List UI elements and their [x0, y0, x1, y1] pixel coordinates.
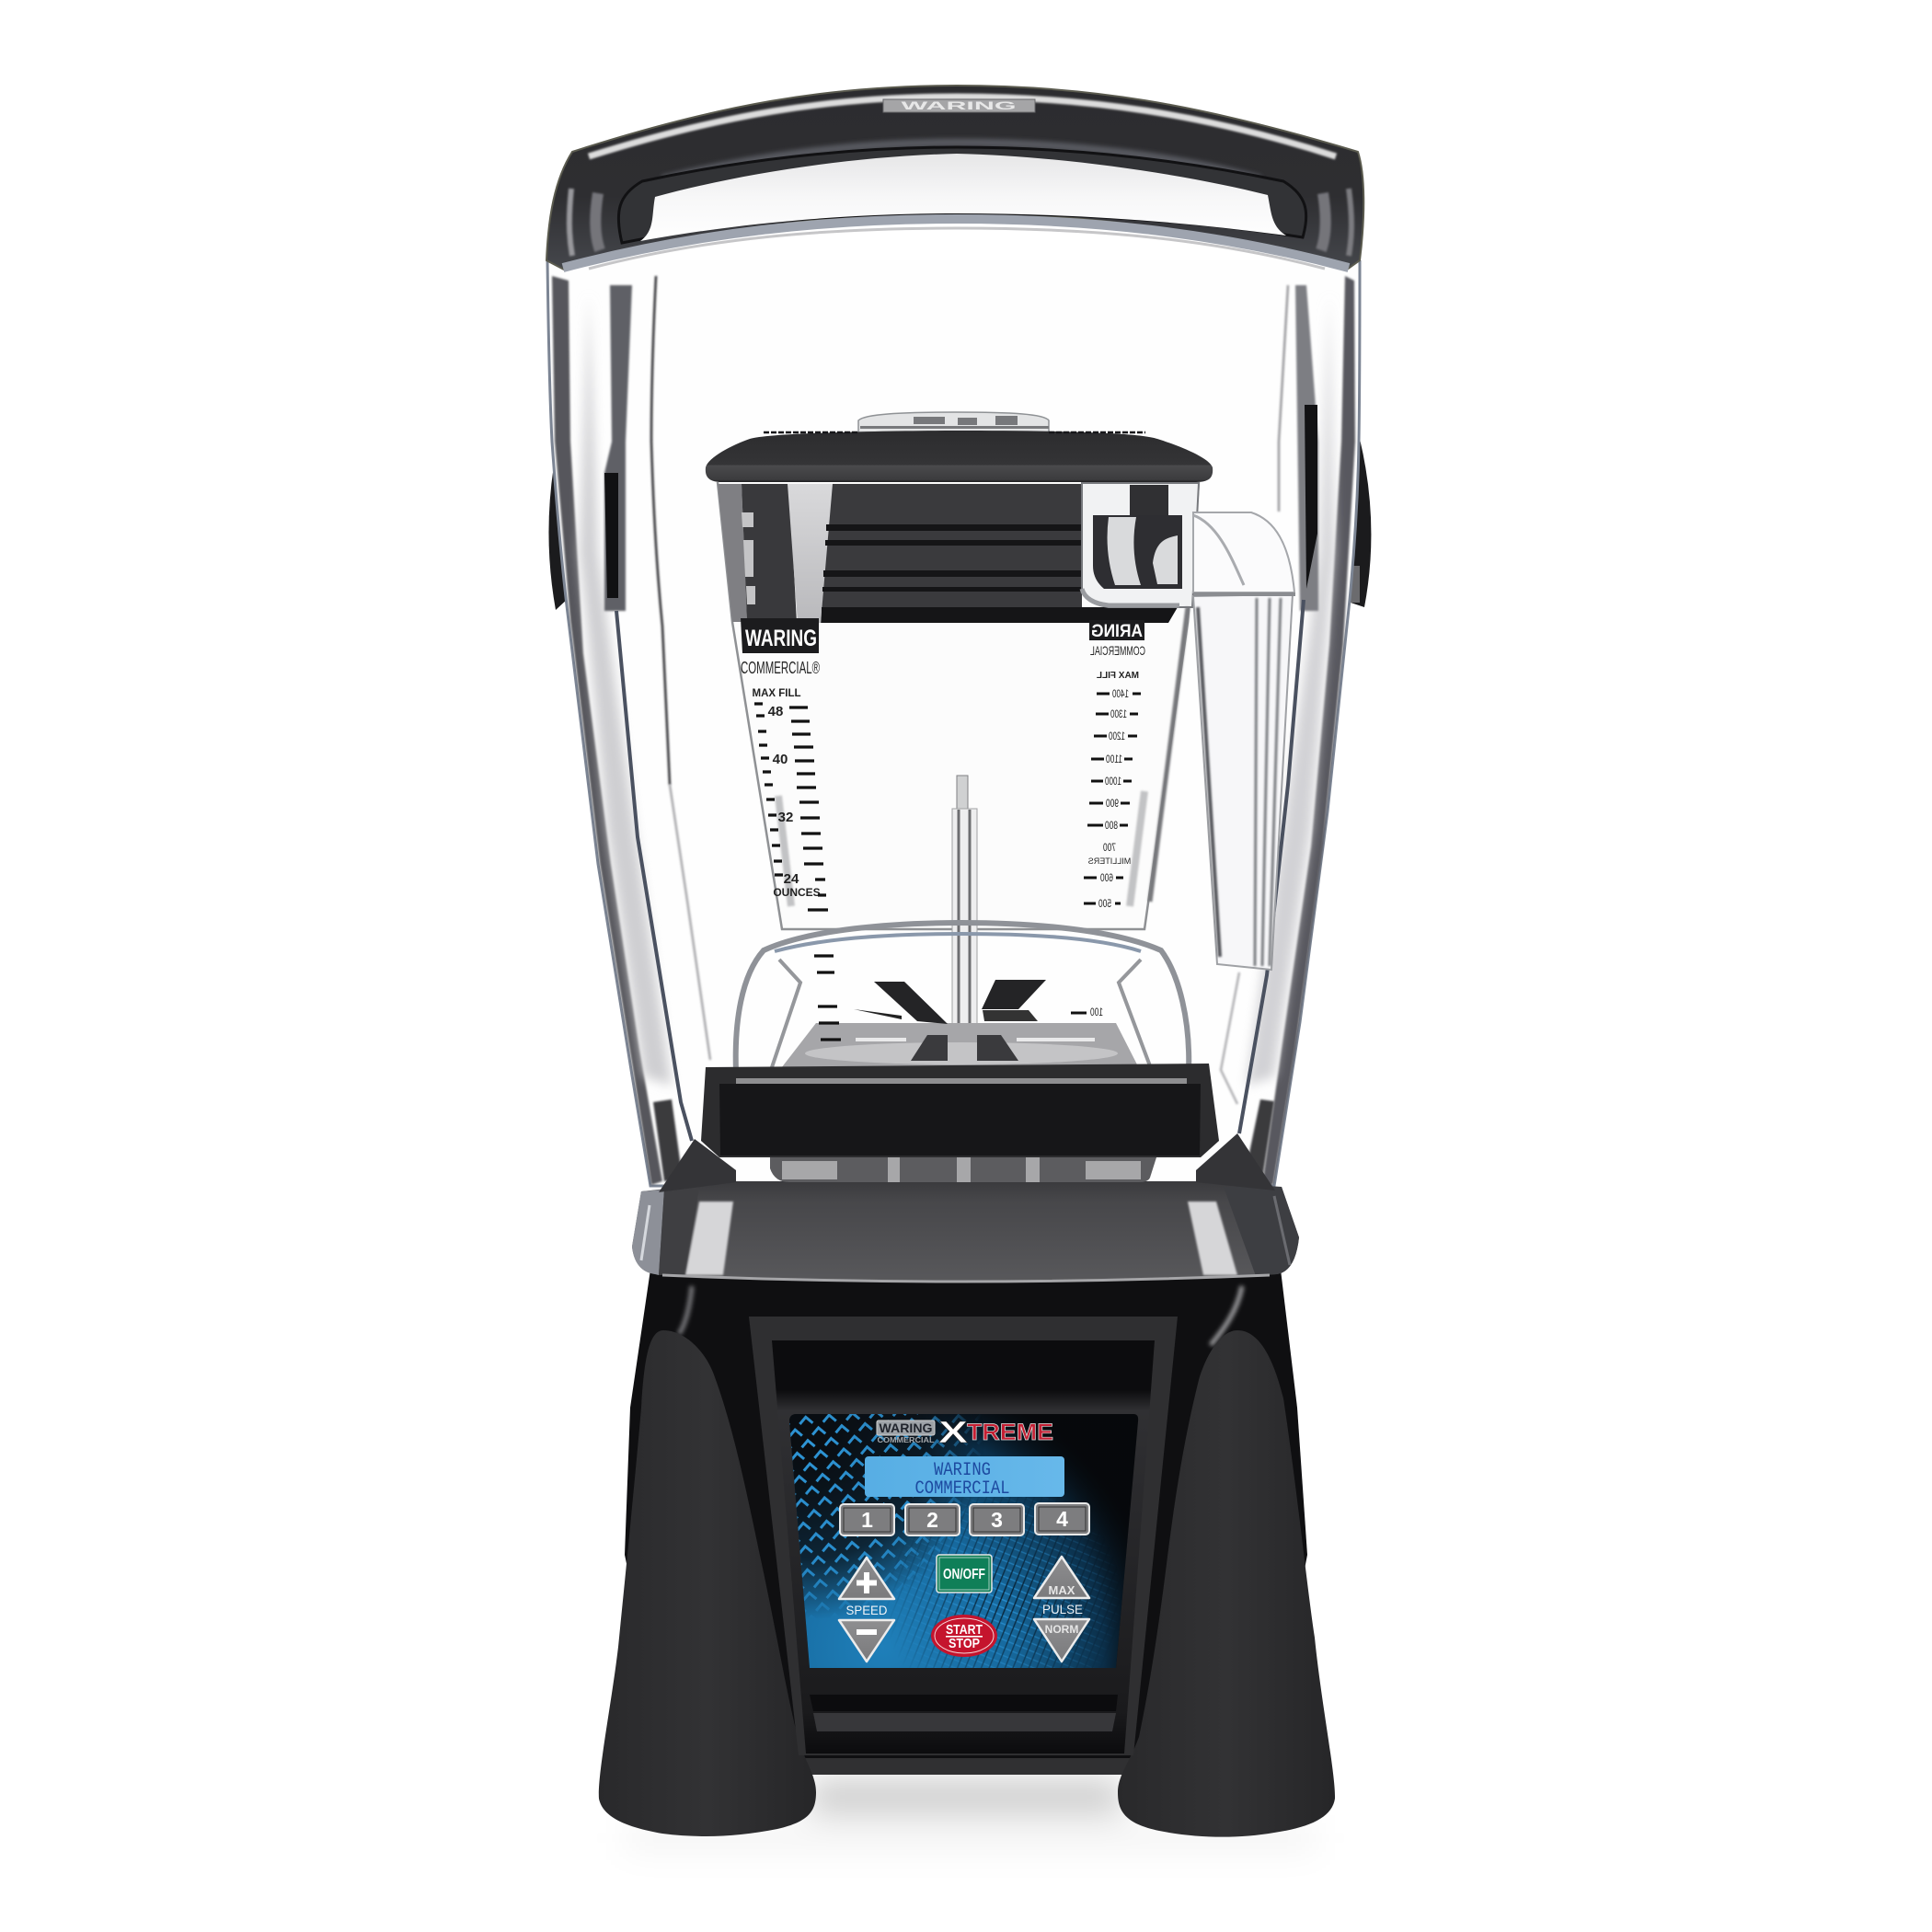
- left outer dark band: [552, 276, 662, 1185]
- right jar marking: millilitre scale: 1400: [1112, 687, 1129, 700]
- collar left highlight: [685, 1202, 733, 1275]
- right bottom dark block: [1244, 1099, 1274, 1179]
- right jar marking: millilitre scale: 700: [1103, 841, 1116, 854]
- jar base glass shoulder: [736, 923, 1189, 1072]
- brand logo: Waring Commercial: WARING: [880, 1420, 933, 1435]
- divider rim: [563, 219, 1349, 268]
- blade assembly: [854, 980, 1046, 1024]
- LCD display: WARING: [934, 1460, 991, 1481]
- side latch knobs: [548, 439, 1371, 610]
- right jar marking: millilitre scale: [1071, 687, 1141, 1018]
- right second line: [1239, 600, 1304, 1133]
- preset button 3: 3: [991, 1508, 1003, 1532]
- pour spout: [1082, 483, 1199, 607]
- shield body outline: [547, 260, 1360, 1186]
- top badge with moulded brand name: WARING: [902, 99, 1016, 112]
- handle lip: [1193, 592, 1295, 596]
- right jar wall shade: [1150, 607, 1188, 902]
- preset button 2: [905, 1504, 960, 1535]
- right soft grey fill: [1247, 294, 1334, 1086]
- jar pad front bar: [701, 1064, 1219, 1157]
- spout light patches: [1108, 517, 1178, 585]
- jar handle: [1193, 512, 1295, 970]
- right jar marking: mirrored brand: ARING: [1091, 622, 1143, 641]
- pulse label: PULSE: [1042, 1602, 1083, 1616]
- baffle wall strip: [718, 484, 747, 622]
- right dark wedge under jar pad: [1196, 1133, 1275, 1190]
- LCD display: COMMERCIAL: [914, 1478, 1010, 1500]
- shoulder blue line: [775, 934, 1141, 951]
- baffle left dark: [742, 484, 797, 623]
- brand logo: Xtreme: [938, 1415, 1053, 1449]
- left side reflections: [552, 276, 710, 1185]
- base metal sheen: [805, 1035, 1118, 1064]
- right jar marking: millilitre scale: 1000: [1105, 775, 1121, 788]
- blade shaft: [952, 776, 977, 1066]
- corner reflections: [569, 189, 1351, 256]
- left jar marking: ounce scale: 48: [768, 704, 783, 719]
- baffle left notches: [742, 512, 755, 604]
- panel blue glow and patterns: [789, 1414, 1139, 1668]
- right jar marking: millilitre scale: 500: [1098, 897, 1111, 910]
- left jar marking: brand: WARING: [745, 626, 817, 651]
- blender jar: [659, 412, 1295, 1192]
- right block: [1295, 285, 1318, 611]
- body highlights: [679, 1286, 692, 1334]
- handle streaks: [1198, 607, 1220, 957]
- pulse max button: [1034, 1557, 1089, 1598]
- window inner highlight: [640, 154, 1286, 241]
- brand logo: Xtreme: X: [938, 1415, 968, 1449]
- left second line: [616, 611, 692, 1141]
- baffle ribs: [822, 524, 1178, 623]
- collar right highlight: [1188, 1202, 1237, 1275]
- right black latch block: [1305, 405, 1317, 589]
- left jar marking: ounce scale: [752, 688, 828, 910]
- base collar: [632, 1181, 1299, 1282]
- left dark wedge under jar pad: [659, 1139, 736, 1192]
- speed minus button: [839, 1620, 894, 1662]
- shoulder left ticks: [814, 956, 841, 1040]
- pulse norm button: NORM: [1045, 1623, 1078, 1636]
- right rubber foot: [1118, 1330, 1335, 1837]
- start/stop button: [931, 1615, 997, 1657]
- right jar marking: millilitre scale: 1100: [1106, 753, 1122, 765]
- inner baffle: [718, 484, 1178, 623]
- speed label: SPEED: [846, 1603, 887, 1617]
- preset button 4: 4: [1056, 1507, 1068, 1531]
- preset button 4: [1035, 1503, 1089, 1535]
- left jar marking: ounce scale: 40: [773, 752, 788, 767]
- shield top window: [618, 147, 1306, 243]
- brand logo: Waring Commercial: [877, 1420, 935, 1444]
- on/off button: ON/OFF: [943, 1567, 985, 1582]
- pulse norm button: [1034, 1619, 1089, 1662]
- bottom ridge shadow: [810, 1695, 1118, 1711]
- preset button 3: [970, 1504, 1024, 1535]
- speed plus button: [839, 1558, 894, 1599]
- handle top: [1193, 512, 1294, 592]
- top badge with moulded brand name: [883, 99, 1035, 112]
- spout rim curve: [1082, 589, 1179, 605]
- black base housing: [625, 1270, 1307, 1775]
- baffle main: [821, 484, 1082, 623]
- preset button 1: [840, 1504, 894, 1535]
- on/off button: [937, 1555, 992, 1593]
- collar left end streaks: [641, 1205, 650, 1260]
- handle inner arc: [1193, 515, 1244, 585]
- top frame white strip: [589, 97, 1336, 156]
- pad top light band: [736, 1078, 1187, 1084]
- start/stop button: START: [946, 1622, 983, 1638]
- LCD display: [865, 1456, 1064, 1500]
- right jar marking: millilitre scale: 900: [1106, 797, 1119, 810]
- glossy body: [625, 1270, 1307, 1775]
- spout dark interior: [1093, 515, 1182, 589]
- right side reflections: [1221, 276, 1355, 1185]
- left rubber foot: [599, 1330, 816, 1836]
- collar right end streak: [1274, 1196, 1290, 1265]
- pulse max button: MAX: [1049, 1583, 1075, 1597]
- shoulder corner strips: [768, 960, 1155, 1078]
- jar metal base: [778, 1023, 1141, 1072]
- right jar marking: mirrored brand: MAX FILL: [1097, 671, 1139, 681]
- left jar marking: ounce scale: OUNCES: [773, 886, 821, 899]
- baffle highlight: [788, 484, 834, 623]
- handle right streaks: [1255, 598, 1281, 966]
- right inner boundary lower: [1221, 972, 1239, 1104]
- left jar marking: brand: [741, 618, 820, 677]
- lid speckled top edge: [764, 431, 1145, 433]
- jar lid: [706, 431, 1213, 482]
- jar clear walls: [718, 482, 1199, 929]
- side ribs on jar: [778, 791, 1144, 906]
- right jar marking: millilitre scale: 100: [1090, 1006, 1103, 1018]
- lid shield: clear enclosure: [546, 86, 1363, 1186]
- divider rim lower highlight: [589, 228, 1325, 269]
- left jar marking: ounce scale: 32: [778, 810, 793, 825]
- lower lip: [790, 1758, 1142, 1775]
- jar cap: [858, 412, 1049, 432]
- right jar marking: mirrored brand: [1089, 620, 1145, 681]
- collar bottom highlight: [662, 1275, 1270, 1282]
- brand logo: Waring Commercial: COMMERCIAL: [878, 1436, 935, 1444]
- right outer dark band: [1262, 276, 1355, 1185]
- brand logo: Xtreme: TREME: [967, 1420, 1053, 1445]
- left jar marking: ounce scale: MAX FILL: [752, 688, 801, 699]
- collar left translucent end: [632, 1190, 664, 1275]
- handle body: [1193, 594, 1293, 970]
- left soft grey fill: [580, 294, 672, 1086]
- collar right dark part: [1224, 1187, 1299, 1276]
- control panel face: [789, 1414, 1139, 1668]
- left jar marking: ounce scale: 24: [784, 871, 799, 887]
- preset button 2: 2: [926, 1508, 938, 1532]
- control panel bezel: [749, 1317, 1178, 1755]
- shield top frame: [546, 86, 1363, 270]
- right jar marking: mirrored brand: COMMERCIAL: [1090, 643, 1145, 658]
- spout dark upper: [1130, 485, 1168, 515]
- collar left dark part: [659, 1187, 699, 1275]
- left inner boundary lower: [670, 785, 710, 1060]
- panel background: [789, 1414, 1138, 1668]
- preset button 1: 1: [861, 1508, 873, 1532]
- left dark upper block: [604, 285, 632, 611]
- left inner boundary line: [651, 276, 670, 785]
- right jar marking: millilitre scale: 800: [1105, 819, 1118, 832]
- start/stop button: STOP: [949, 1636, 980, 1651]
- dark band lighter reflection: [662, 143, 1260, 179]
- right inner boundary line: [1279, 285, 1288, 512]
- right jar marking: millilitre scale: 1300: [1110, 707, 1127, 720]
- spout body: [1082, 483, 1199, 607]
- blender product illustration: [546, 85, 1371, 1841]
- right jar marking: millilitre scale: 1200: [1109, 730, 1125, 742]
- base pad under jar: [770, 1157, 1156, 1182]
- left jar marking: brand: COMMERCIAL®: [741, 659, 820, 677]
- right jar marking: millilitre scale: MILLITERS: [1088, 857, 1131, 866]
- bottom ridge: [813, 1713, 1116, 1731]
- floor shadow: [626, 1780, 1316, 1849]
- right jar marking: millilitre scale: 600: [1100, 871, 1113, 884]
- left black latch block: [604, 473, 618, 598]
- left bottom dark block: [653, 1099, 683, 1181]
